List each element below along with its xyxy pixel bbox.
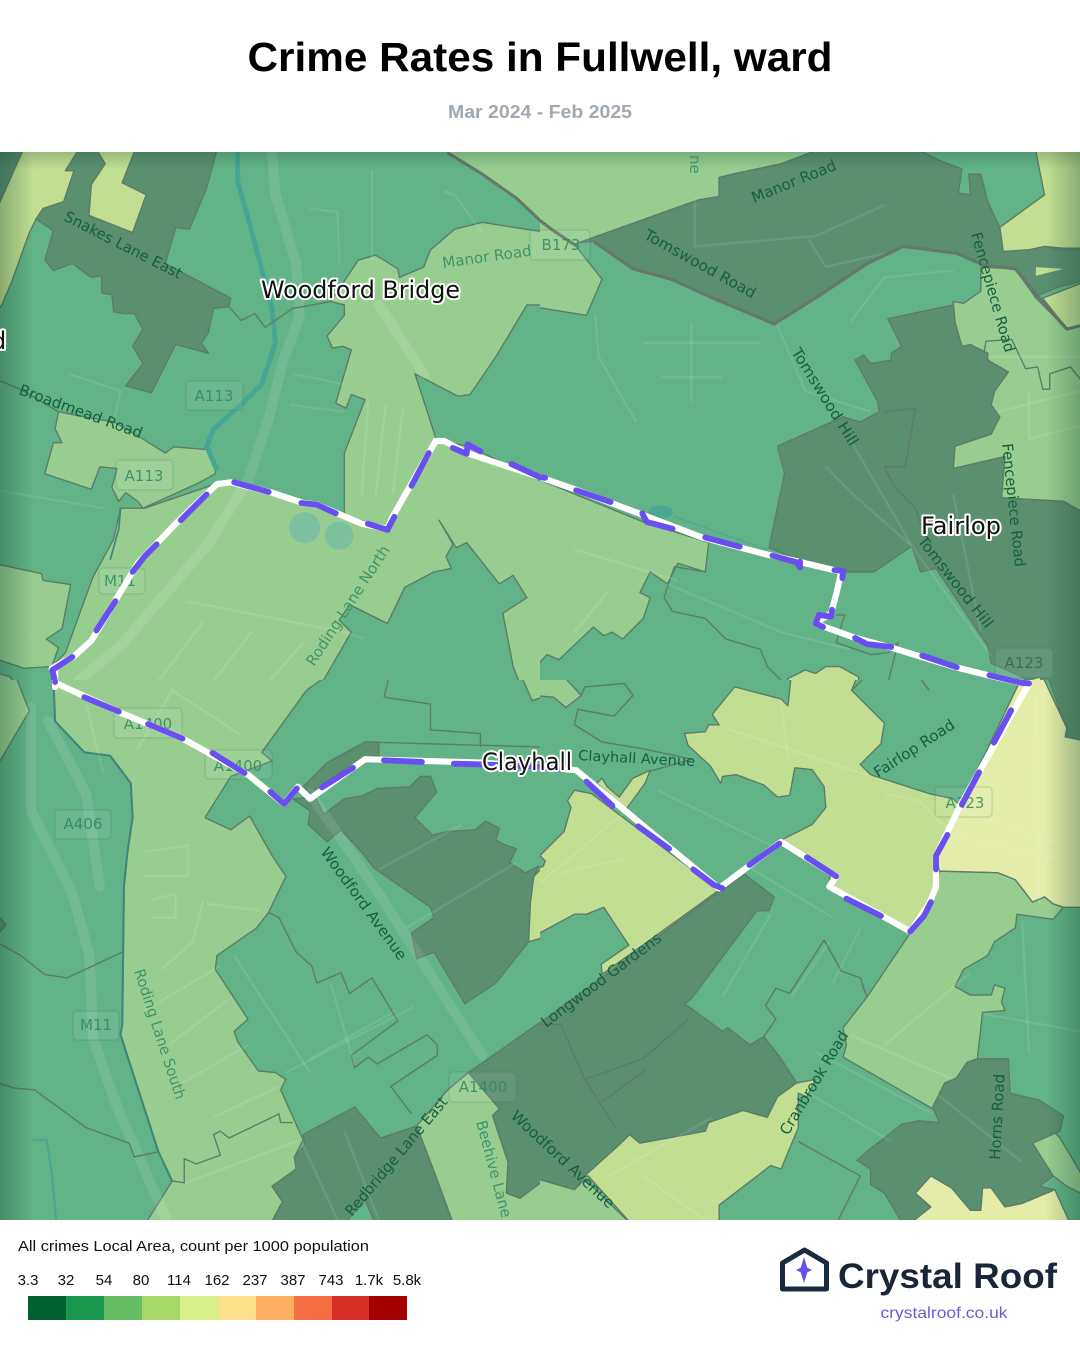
road labels: ne — [686, 155, 704, 174]
legend values: 1.7k — [355, 1272, 384, 1289]
road labels: Longwood Gardens — [538, 929, 665, 1031]
road shields: A406 — [64, 815, 102, 833]
road shields: A113 — [195, 387, 233, 405]
place labels: Fairlop — [921, 512, 1001, 540]
road labels: Tomswood Road — [640, 225, 759, 302]
road labels: Tomswood Hill — [913, 532, 997, 632]
logo wordmark: Crystal Roof — [838, 1257, 1057, 1296]
legend values: 54 — [96, 1272, 112, 1289]
road labels: Manor Road — [749, 156, 839, 207]
road labels: Broadmead Road — [17, 381, 145, 442]
road shields: A123 — [946, 794, 984, 812]
road shields: A123 — [1005, 654, 1043, 672]
road labels: Redbridge Lane East — [341, 1093, 452, 1220]
subtitle: date range: Mar 2024 - Feb 2025 — [448, 101, 632, 122]
road labels: Roding Lane North — [302, 542, 394, 669]
road shields: M11 — [104, 572, 136, 590]
map edge vignette — [0, 152, 1080, 1220]
legend values: 162 — [204, 1272, 230, 1289]
road shields: A1400 — [124, 715, 172, 733]
map region: north-east — [540, 152, 1080, 680]
legend values: 114 — [167, 1272, 191, 1289]
legend values — [18, 1272, 422, 1289]
road labels: Fencepiece Road — [998, 443, 1029, 568]
place labels — [0, 276, 1001, 776]
road labels: Fairlop Road — [870, 716, 958, 781]
legend title: All crimes Local Area, count per 1000 population — [18, 1238, 369, 1255]
road labels: Woodford Avenue — [317, 844, 411, 964]
road labels: Cranbrook Road — [776, 1028, 852, 1138]
logo icon: house with sparkle — [782, 1250, 826, 1289]
place labels: Woodford Bridge — [261, 276, 460, 304]
road labels: Tomswood Hill — [787, 344, 862, 449]
road labels: Manor Road — [441, 242, 533, 272]
road labels: Clayhall Avenue — [578, 748, 695, 770]
road shields — [55, 230, 1053, 1102]
road labels: Snakes Lane East — [61, 208, 185, 283]
map region: south-east — [540, 680, 1080, 1220]
road labels: Horns Road — [986, 1073, 1008, 1160]
road labels: Roding Lane South — [130, 967, 189, 1102]
map region: south-west — [0, 680, 540, 1220]
legend values: 3.3 — [18, 1272, 38, 1289]
legend values: 32 — [58, 1272, 74, 1289]
road shields: M11 — [80, 1016, 112, 1034]
title: Crime Rates in Fullwell, ward — [248, 34, 832, 80]
map region: north-west — [0, 152, 540, 680]
legend values: 237 — [242, 1272, 268, 1289]
road labels: Fencepiece Road — [967, 230, 1019, 354]
road shields: A1400 — [459, 1078, 507, 1096]
place labels: Clayhall — [482, 748, 572, 776]
road shields: B173 — [542, 236, 580, 254]
road labels: Woodford Avenue — [507, 1107, 618, 1212]
road shields: A113 — [125, 467, 163, 485]
website url: crystalroof.co.uk — [880, 1305, 1009, 1322]
legend values: 387 — [280, 1272, 306, 1289]
road labels: Beehive Lane — [472, 1118, 515, 1220]
legend values: 743 — [318, 1272, 344, 1289]
legend values: 5.8k — [393, 1272, 422, 1289]
road labels — [17, 155, 1029, 1220]
ward boundary route — [52, 441, 1029, 931]
legend colour scale — [28, 1296, 407, 1320]
legend values: 80 — [133, 1272, 149, 1289]
road shields: A1400 — [214, 757, 262, 775]
